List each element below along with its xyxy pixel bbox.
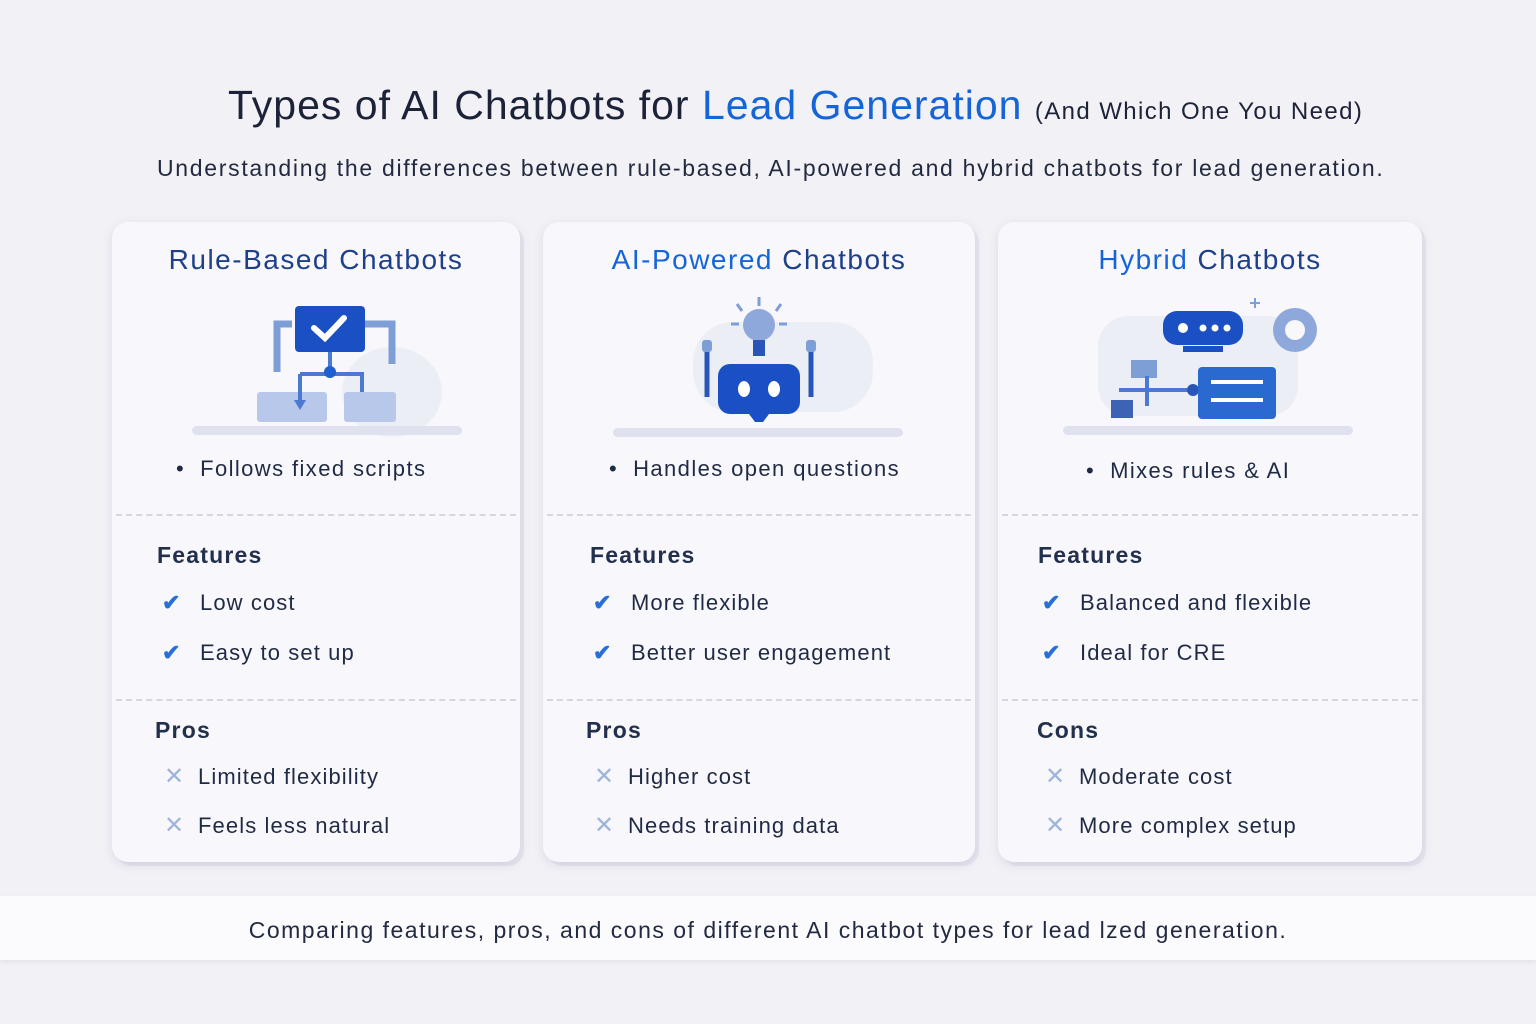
pro items: Higher cost	[628, 764, 751, 789]
panel: rule-based: Easy to set up	[200, 640, 355, 665]
icon: flowchart	[192, 306, 462, 437]
features heading: Features	[1038, 542, 1143, 568]
bullet: • Handles open questions	[609, 456, 900, 481]
features heading: Features	[157, 542, 262, 568]
panel: hybrid: ✔	[1042, 640, 1062, 665]
features heading: Features	[590, 542, 695, 568]
feature items: Balanced and flexible	[1080, 590, 1312, 615]
heading: rule-based: Rule-Based Chatbots	[169, 244, 463, 275]
panel: hybrid: Ideal for CRE	[1080, 640, 1226, 665]
footer caption: Comparing features, pros, and cons of different AI chatbot types for lead lzed generation.	[249, 917, 1287, 943]
icon: hybrid	[1063, 298, 1353, 435]
feature items: ✔	[593, 590, 613, 615]
panel: rule-based: ✕	[164, 812, 185, 839]
panel: ai-powered	[543, 222, 975, 862]
heading: hybrid: Hybrid Chatbots	[1098, 244, 1322, 275]
panel: hybrid: More complex setup	[1079, 813, 1297, 838]
feature items: ✔	[1042, 590, 1062, 615]
title: Types of AI Chatbots for Lead Generation (And Which One You Need)	[228, 82, 1363, 128]
panel: ai-powered: Needs training data	[628, 813, 840, 838]
subtitle: Understanding the differences between rule-based, AI-powered and hybrid chatbots for lead generation.	[157, 155, 1384, 181]
bullet: • Mixes rules & AI	[1086, 458, 1290, 483]
feature items: ✔	[162, 590, 182, 615]
con items: ✕	[1045, 763, 1066, 790]
heading: ai-powered: AI-Powered Chatbots	[612, 244, 906, 275]
con items: Moderate cost	[1079, 764, 1233, 789]
pro items: ✕	[594, 763, 615, 790]
bullet: • Follows fixed scripts	[176, 456, 426, 481]
feature items: Low cost	[200, 590, 296, 615]
panel: ai-powered: ✔	[593, 640, 613, 665]
panel: rule-based: ✔	[162, 640, 182, 665]
pro items: ✕	[164, 763, 185, 790]
pro items: Limited flexibility	[198, 764, 379, 789]
panel: rule-based: Feels less natural	[198, 813, 390, 838]
cons heading: Cons	[1037, 717, 1099, 743]
feature items: More flexible	[631, 590, 770, 615]
icon: robot	[613, 297, 903, 437]
panel: hybrid	[998, 222, 1422, 862]
footer band	[0, 896, 1536, 960]
panel: ai-powered: ✕	[594, 812, 615, 839]
pros heading: Pros	[586, 717, 642, 743]
panel: ai-powered: Better user engagement	[631, 640, 891, 665]
panel: rule-based	[112, 222, 520, 862]
panel: hybrid: ✕	[1045, 812, 1066, 839]
pros heading: Pros	[155, 717, 211, 743]
